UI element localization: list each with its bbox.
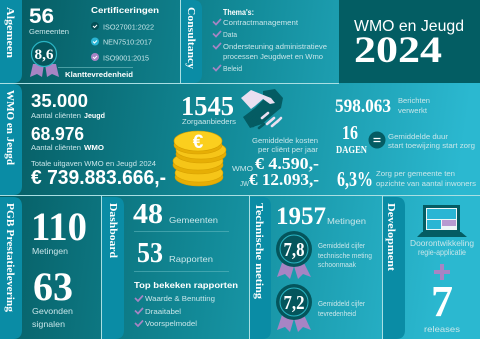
tab: Consultancy: Consultancy	[185, 7, 196, 70]
badge: 7,8: Gemiddeld cijfer	[318, 243, 366, 250]
stat: 53 Rapporten: Rapporten	[169, 254, 213, 264]
text: average costs: WMO	[232, 164, 253, 173]
certifications: ISO9001:2015	[103, 54, 149, 62]
stat: 1545 providers: 1545	[181, 91, 234, 121]
certifications: Certificeringen	[91, 5, 159, 15]
text: development	[410, 238, 474, 257]
stat: total spend: € 739.883.666,-	[31, 167, 166, 189]
text: average costs: Gemiddelde kosten	[252, 136, 318, 145]
stat: total spend: Totale uitgaven WMO en Jeugd 2024	[31, 159, 156, 168]
panel: title	[339, 0, 480, 83]
stat: 7 releases: releases	[424, 324, 460, 334]
tab: Development: Development	[385, 203, 396, 272]
stat: 6,3%: 6,3%	[337, 167, 373, 191]
stat: clients WMO	[31, 124, 105, 152]
stat: messages: verwerkt	[398, 106, 428, 115]
stat: 7 releases: 7	[431, 277, 453, 326]
stat: 6,3%: opzichte van aantal inwoners	[376, 179, 476, 188]
stat: 16 days: Gemiddelde duur	[388, 132, 449, 141]
stat: 1957 Metingen: Metingen	[327, 216, 366, 226]
stat: clients WMO: 68.976	[31, 124, 84, 144]
stat: messages: Berichten	[398, 96, 430, 105]
icon: laptop	[417, 205, 467, 237]
stat: messages: 598.063	[335, 96, 391, 117]
stat: clients WMO: Aantal cliënten	[31, 145, 81, 152]
list: top reports: Top bekeken rapporten	[134, 280, 238, 290]
text: average costs: € 4.590,-	[255, 154, 319, 173]
stat: clients WMO: WMO	[84, 145, 105, 152]
stat: 48 Gemeenten	[133, 198, 229, 232]
text: average costs: JW	[240, 179, 250, 188]
stat: 48 Gemeenten: Gemeenten	[169, 215, 218, 225]
badge: 7,2: 7,2	[284, 292, 304, 314]
stat: 16 days: start toewijzing start zorg	[388, 141, 475, 150]
icon: coins: €	[193, 132, 204, 153]
themes: processen Jeugdwet en Wmo	[223, 52, 323, 61]
text: development: Doorontwikkeling	[410, 238, 474, 248]
stat: 56 Gemeenten: Gemeenten	[29, 27, 69, 36]
badge: 8,6 Klanttevredenheid	[30, 42, 133, 79]
badge: 7,8: 7,8	[284, 239, 304, 261]
themes: Ondersteuning administratieve	[223, 42, 327, 51]
tab: PGB Prestatielevering: PGB Prestatielevering	[4, 203, 15, 313]
tab: Consultancy	[181, 0, 202, 83]
stat: 16 days	[336, 122, 475, 156]
icon: plus	[434, 264, 450, 280]
badge: 8,6 Klanttevredenheid: 8,6	[34, 47, 54, 63]
list: top reports: Voorspelmodel	[145, 319, 197, 328]
badge: 7,8: technische meting	[318, 253, 372, 260]
badge: 8,6 Klanttevredenheid: Klanttevredenheid	[65, 70, 133, 79]
tab: Technische meting: Technische meting	[253, 203, 264, 300]
stat: 63 signals: 63	[33, 264, 73, 309]
stat: clients Jeugd: Jeugd	[84, 113, 105, 120]
stat: 16 days: DAGEN	[336, 144, 367, 156]
icon: coins	[173, 131, 226, 186]
stat: 63 signals	[32, 264, 73, 329]
list: top reports: Draaitabel	[145, 307, 181, 316]
certifications: NEN7510:2017	[103, 38, 152, 46]
tab: WMO en Jeugd	[0, 84, 22, 195]
list: top reports: Waarde & Benutting	[145, 294, 215, 303]
stat: clients Jeugd	[31, 91, 105, 120]
tab: Development	[383, 197, 405, 339]
stat: 63 signals: signalen	[32, 319, 65, 329]
themes: Thema's:	[223, 7, 254, 17]
tab: WMO en Jeugd: WMO en Jeugd	[4, 90, 15, 165]
badge: 7,2: tevredenheid	[318, 311, 356, 318]
themes: Data	[223, 30, 238, 39]
stat: 6,3%	[337, 167, 476, 191]
text: average costs: € 12.093,-	[249, 170, 319, 189]
tab: Dashboard: Dashboard	[107, 203, 118, 258]
stat: 7 releases	[424, 277, 460, 334]
stat: 6,3%: Zorg per gemeente ten	[376, 169, 455, 178]
stat: 1957 Metingen	[276, 203, 366, 230]
tab: PGB Prestatielevering	[0, 197, 22, 339]
title: year: 2024	[354, 30, 442, 71]
stat: 53 Rapporten	[134, 237, 229, 272]
tab: Dashboard	[102, 197, 124, 339]
stat: clients Jeugd: Aantal cliënten	[31, 113, 81, 120]
stat: 16 days: 16	[342, 122, 358, 144]
tab: Algemeen: Algemeen	[4, 7, 15, 58]
stat: 1545 providers: Zorgaanbieders	[182, 117, 236, 126]
tab: Algemeen	[0, 0, 22, 83]
certifications: ISO27001:2022	[103, 22, 154, 32]
text: development: regie-applicatie	[418, 247, 466, 257]
themes: Contractmanagement	[223, 18, 299, 27]
icon: handshake	[241, 89, 283, 128]
badge: 7,2	[276, 284, 366, 332]
text: average costs	[232, 136, 319, 189]
themes	[213, 7, 327, 73]
badge: 7,2: Gemiddeld cijfer	[318, 301, 366, 308]
themes: Beleid	[223, 64, 242, 73]
stat: 56 Gemeenten	[29, 5, 69, 36]
stat: clients Jeugd: 35.000	[31, 91, 88, 111]
badge: 7,8: schoonmaak	[318, 262, 356, 269]
tab: Technische meting	[250, 197, 271, 339]
badge: 7,8	[276, 231, 372, 279]
text: average costs: per cliënt per jaar	[258, 145, 319, 154]
certifications	[91, 5, 159, 62]
stat: 53 Rapporten: 53	[137, 237, 163, 269]
stat: messages	[335, 96, 430, 117]
list: top reports	[134, 280, 238, 328]
stat: 63 signals: Gevonden	[32, 306, 73, 316]
stat: 1957 Metingen: 1957	[276, 203, 326, 230]
stat: 110 Metingen: Metingen	[32, 246, 68, 256]
stat: 110 Metingen: 110	[31, 204, 87, 249]
stat: 56 Gemeenten: 56	[29, 5, 54, 28]
title: WMO en Jeugd: WMO en Jeugd	[354, 18, 464, 35]
stat: 48 Gemeenten: 48	[133, 198, 163, 230]
